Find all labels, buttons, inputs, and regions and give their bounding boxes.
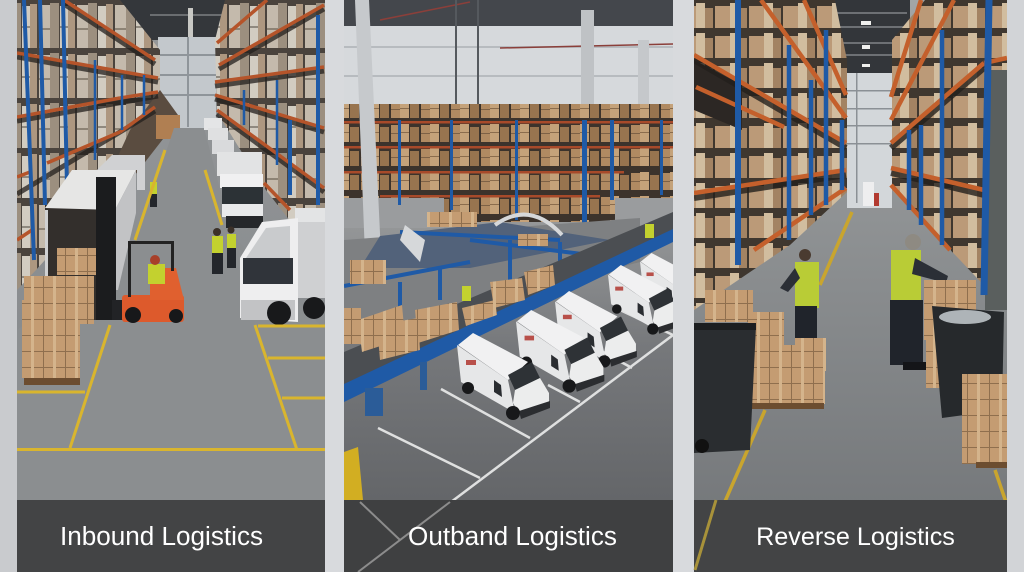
structural column — [355, 0, 381, 255]
forklift — [96, 177, 184, 323]
aisle floor — [17, 128, 325, 500]
caption band: Inbound Logistics: Inbound Logistics — [60, 521, 263, 551]
left storage rack — [17, 0, 180, 290]
right returns cartons and bin — [924, 280, 1007, 468]
delivery vans — [457, 253, 673, 420]
left waste bin — [694, 323, 756, 453]
caption band: Inbound Logistics — [17, 500, 325, 572]
yellow floor markings — [724, 211, 1007, 500]
ceiling and end wall — [835, 0, 910, 208]
left aisle rack — [694, 0, 847, 310]
van 2 — [516, 310, 604, 393]
right storage rack — [214, 0, 325, 219]
distant trucks — [97, 118, 234, 190]
parking bay lines — [378, 310, 673, 500]
caption band: Outband Logistics — [344, 500, 673, 572]
ceiling and back wall — [120, 0, 225, 128]
caption band: Reverse Logistics: Reverse Logistics — [756, 523, 955, 551]
van 5 — [640, 253, 673, 304]
packing machinery — [344, 212, 640, 306]
warehouse wall and ceiling — [344, 0, 673, 104]
yellow bollard — [344, 447, 363, 500]
center truck — [217, 152, 263, 228]
conveyor belt with boxes — [344, 212, 673, 416]
back racks — [344, 104, 673, 228]
workers on the line — [462, 224, 654, 301]
panel: reverse logistics photo — [694, 0, 1007, 500]
left returns cartons — [705, 290, 826, 409]
panel: inbound logistics photo — [17, 0, 325, 500]
workers in vests — [150, 182, 236, 274]
right aisle rack — [891, 0, 1007, 310]
caption band: Reverse Logistics — [694, 500, 1007, 572]
panel: outbound logistics photo — [344, 0, 673, 500]
van 3 — [555, 291, 637, 368]
caption band: Outband Logistics: Outband Logistics — [408, 521, 617, 551]
worker in the aisle — [890, 234, 948, 370]
unloading trailer — [45, 170, 136, 320]
van 1 — [457, 333, 550, 420]
stacked cartons — [22, 276, 94, 385]
van 4 — [608, 265, 673, 335]
right truck — [240, 208, 325, 325]
yellow floor markings — [17, 150, 325, 450]
worker with clipboard — [780, 249, 819, 338]
